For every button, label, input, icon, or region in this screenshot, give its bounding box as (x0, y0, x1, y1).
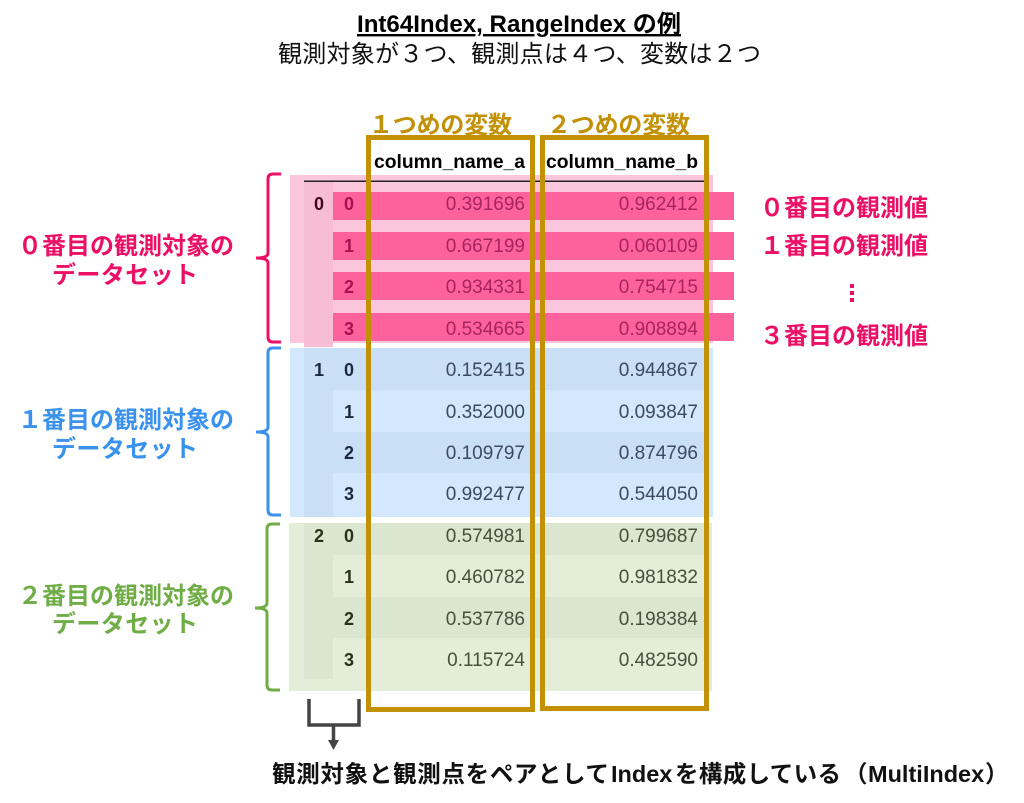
green values: 0.574981 (446, 526, 525, 547)
panel: observation target 0 (pink) (290, 175, 734, 347)
pink values: 0.934331 (446, 277, 525, 298)
pink values: 0.908894 (619, 319, 698, 340)
blue values: 0.093847 (619, 402, 698, 423)
labels: observed values: １番目の観測値 (760, 233, 928, 260)
caption: MultiIndex (272, 761, 1008, 787)
pink index labels: 2 (344, 277, 354, 297)
label: target 2: データセット (52, 610, 198, 638)
column variable labels: ２つめの変数 (547, 112, 690, 139)
green index labels: 2 (314, 526, 324, 546)
title (278, 11, 761, 68)
title: 観測対象が３つ、観測点は４つ、変数は２つ (278, 41, 761, 68)
green values: 0.460782 (446, 567, 525, 588)
label: target 0: ０番目の観測対象の (18, 233, 234, 260)
green values: 0.799687 (619, 526, 698, 547)
title: Int64Index, RangeIndex の例 (357, 11, 681, 38)
pink values: 0.534665 (446, 319, 525, 340)
table column headers (374, 152, 698, 173)
caption: MultiIndex: （ (844, 761, 868, 787)
gold box: variable 2 (542, 138, 706, 708)
blue values: 0.109797 (446, 443, 525, 464)
blue index labels: 2 (344, 443, 354, 463)
panel: observation target 1 (blue) (290, 348, 713, 517)
column variable labels: １つめの変数 (369, 112, 512, 139)
pink values: 0.962412 (619, 194, 698, 215)
label: target 1: １番目の観測対象の (18, 407, 234, 434)
caption: MultiIndex: を構成している (675, 761, 841, 787)
blue values: 0.992477 (446, 484, 525, 505)
green values (446, 526, 698, 671)
blue index labels: 0 (344, 360, 354, 380)
green values: 0.198384 (619, 609, 698, 630)
gold box: variable 1 (368, 138, 532, 710)
table column headers: column_name_a (374, 152, 525, 173)
brace: pink (256, 174, 281, 342)
observation rows highlighted (333, 192, 734, 341)
pink index labels: 0 (314, 194, 324, 214)
brace: green (255, 524, 280, 690)
blue values: 0.874796 (619, 443, 698, 464)
blue values (446, 360, 698, 505)
label: target 1 (18, 407, 234, 463)
arrow: index bracket (309, 699, 359, 750)
labels: observed values: ３番目の観測値 (760, 323, 928, 350)
column variable labels (369, 112, 690, 139)
label: target 0: データセット (52, 261, 198, 289)
blue values: 0.544050 (619, 484, 698, 505)
blue index labels: 1 (344, 402, 354, 422)
pink values (446, 194, 698, 340)
pink index labels: 3 (344, 319, 354, 339)
caption: MultiIndex: ） (985, 761, 1008, 787)
pink index labels: 0 (344, 194, 354, 214)
green values: 0.537786 (446, 609, 525, 630)
blue index labels: 3 (344, 484, 354, 504)
labels: observed values (760, 195, 928, 350)
pink values: 0.667199 (446, 236, 525, 257)
brace: blue (256, 348, 281, 515)
green values: 0.981832 (619, 567, 698, 588)
label: target 2: ２番目の観測対象の (18, 583, 234, 610)
table column headers: column_name_b (546, 152, 698, 173)
pink values: 0.754715 (619, 277, 698, 298)
green index labels: 2 (344, 609, 354, 629)
pink index labels (314, 194, 354, 339)
green values: 0.482590 (619, 650, 698, 671)
blue values: 0.152415 (446, 360, 525, 381)
panel: observation target 2 (green) (289, 523, 712, 691)
green index labels: 3 (344, 650, 354, 670)
green index labels: 0 (344, 526, 354, 546)
green index labels: 1 (344, 567, 354, 587)
caption: MultiIndex: Index (611, 761, 672, 787)
label: target 1: データセット (52, 435, 198, 463)
caption: MultiIndex: MultiIndex (868, 761, 984, 787)
label: target 2 (18, 583, 234, 638)
green values: 0.115724 (447, 650, 525, 671)
icon: vertical ellipsis (850, 284, 854, 302)
label: target 0 (18, 233, 234, 289)
pink values: 0.060109 (619, 236, 698, 257)
labels: observed values: ０番目の観測値 (760, 195, 928, 222)
blue index labels: 1 (314, 360, 324, 380)
blue values: 0.352000 (446, 402, 525, 423)
green index labels (314, 526, 354, 670)
blue index labels (314, 360, 354, 504)
caption: MultiIndex: 観測対象と観測点をペアとして (272, 761, 609, 787)
pink values: 0.391696 (446, 194, 525, 215)
pink index labels: 1 (344, 236, 354, 256)
blue values: 0.944867 (619, 360, 698, 381)
